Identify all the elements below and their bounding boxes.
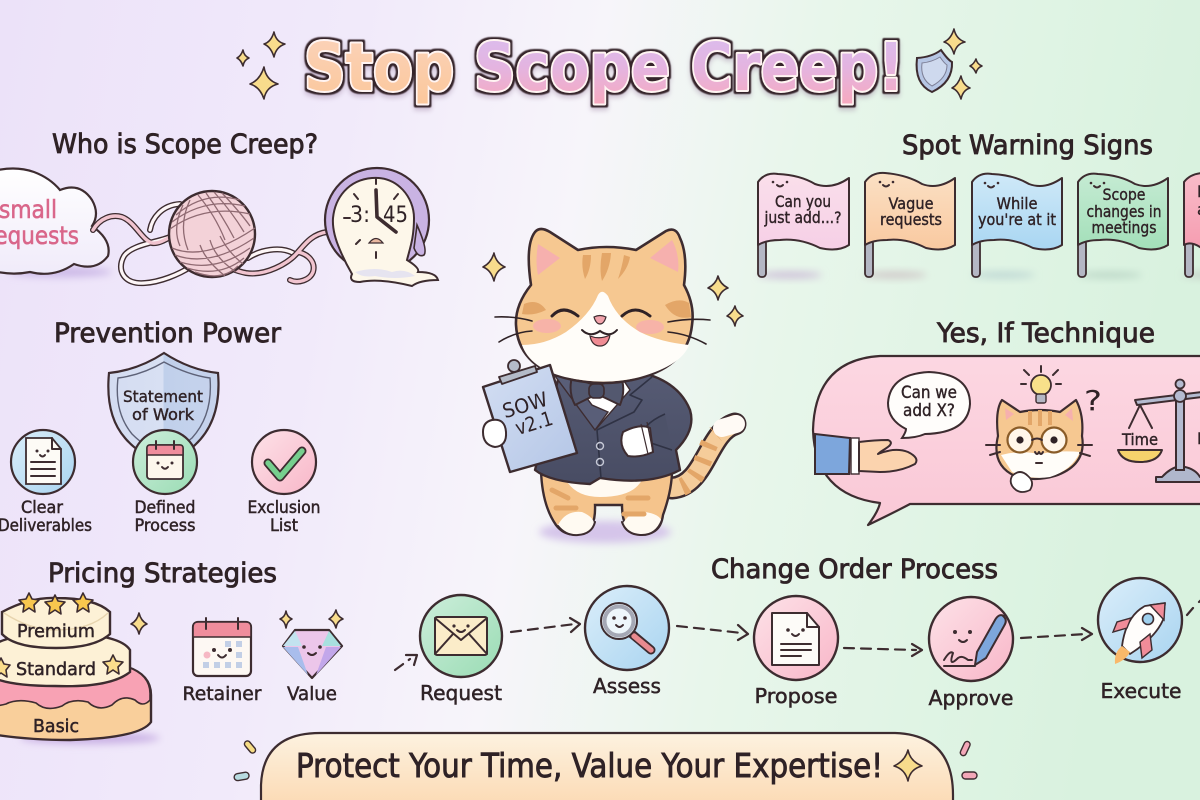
label: propose: Propose [754,684,838,708]
cat jacket [535,372,691,484]
icon: propose document [754,596,838,680]
icon: melting clock showing 3:45: 3: [350,203,370,228]
label: deliverables: Deliverables [0,516,92,536]
icon: execute rocket [1098,578,1182,664]
heading: pricing strategies: Pricing Strategies [48,558,277,589]
title: Creep! [691,29,904,106]
flag: can you just add: Can you [775,192,831,211]
label: retainer: Retainer [182,683,262,705]
heading: prevention power: Prevention Power [54,318,282,349]
banner slogan: Protect Your Time, Value Your Expertise! [296,746,883,785]
arrow: out of execute [1187,597,1200,615]
icon: thinking cat with glasses and light bulb [986,366,1102,492]
label: execute: Execute [1100,679,1182,703]
panel: who is scope creep [0,129,438,286]
icon: clear deliverables [11,430,75,494]
icon: statement of work shield [108,353,219,462]
clipboard labelled SOW v2.1: v2.1 [512,406,556,440]
icon: retainer calendar [193,618,251,676]
label: approve: Approve [928,686,1014,710]
label: assess: Assess [593,674,661,698]
speech bubble: can we add x: Can we [901,383,957,403]
arrow: propose to approve [844,644,922,656]
heading: who is scope creep: Who is Scope Creep? [52,129,318,160]
clipboard labelled SOW v2.1: SOW [499,387,551,423]
icon: client hand with sleeve [815,434,916,474]
central cat mascot in suit holding SOW clipboard [483,229,743,543]
icon: three tier pricing cake: Standard [16,659,96,680]
flag: can you just add: just add...? [764,208,842,227]
icon: request envelope [420,595,502,677]
arrow: request to assess [511,618,580,632]
icon: melting clock showing 3:45 [325,168,438,286]
icon: three tier pricing cake: Basic [33,716,79,737]
flag: scope changes in meetings: changes in [1086,202,1162,221]
flag: can you just add [758,174,849,278]
heading: spot warning signs: Spot Warning Signs [902,130,1153,161]
heading: yes, if technique: Yes, If Technique [936,318,1155,349]
speech bubble: can we add x [888,372,970,438]
cat legs [541,470,672,535]
panel: spot warning signs [758,130,1200,278]
label: request: Request [420,681,502,705]
label: defined: Defined [134,498,196,518]
label: list: List [270,516,298,536]
cat head [495,229,710,383]
label: exclusion: Exclusion [248,498,320,518]
icon: cloud of small requests: small [0,195,57,224]
flag: scope changes in meetings [1078,174,1168,278]
flag: vague requests [863,173,955,278]
icon: defined process calendar [133,430,197,494]
icon: three tier pricing cake: Premium [17,621,95,642]
icon: approve pen and signature [929,597,1013,681]
panel: yes, if technique [813,318,1200,525]
title sparkles and shield [237,29,982,99]
sparkles around cat [483,253,743,326]
label: clear: Clear [21,498,63,518]
icon: statement of work shield: of Work [132,405,195,424]
speech bubble background [813,356,1200,525]
icon: balance scale with time pan [1118,380,1200,482]
flag: while you're at it [971,174,1062,278]
label: process: Process [134,516,196,536]
flag: partially visible fifth flag [1182,173,1200,278]
panel: closing banner [234,733,977,800]
arrow: approve to execute [1021,628,1092,640]
clipboard labelled SOW v2.1 [483,360,577,472]
panel: pricing strategies [0,558,343,744]
flag: while you're at it: you're at it [978,210,1056,229]
cat bow tie [571,377,623,405]
icon: melting clock showing 3:45: 45 [383,203,408,228]
flag: scope changes in meetings: meetings [1092,218,1156,237]
icon: tangled yarn ball [93,191,327,283]
icon: value diamond [280,610,343,678]
confetti [234,740,977,781]
icon: cloud of small requests [0,168,112,277]
panel: change order process [395,554,1200,710]
arrow: assess to propose [677,625,748,640]
icon: statement of work shield: Statement [123,387,203,406]
icon: thinking cat with glasses and light bulb: ? [1084,384,1102,417]
speech bubble: can we add x: add X? [903,401,955,421]
title: Stop [304,29,454,106]
panel: prevention power [0,318,320,536]
flag: while you're at it: While [996,194,1038,213]
icon: balance scale with time pan: Time [1121,430,1158,449]
icon: three tier pricing cake [0,593,160,744]
flag: vague requests: Vague [888,194,934,213]
flag: vague requests: requests [880,210,942,229]
heading: change order process: Change Order Process [711,554,998,585]
icon: assess magnifying glass [585,586,669,670]
icon: exclusion list checkmark [252,430,316,494]
title [304,29,904,106]
arrow: into request [395,655,417,670]
title: Scope [474,29,670,106]
icon: banner sparkle [894,750,922,781]
label: value: Value [287,683,337,705]
flag: scope changes in meetings: Scope [1102,185,1146,204]
cat tail [672,424,736,488]
